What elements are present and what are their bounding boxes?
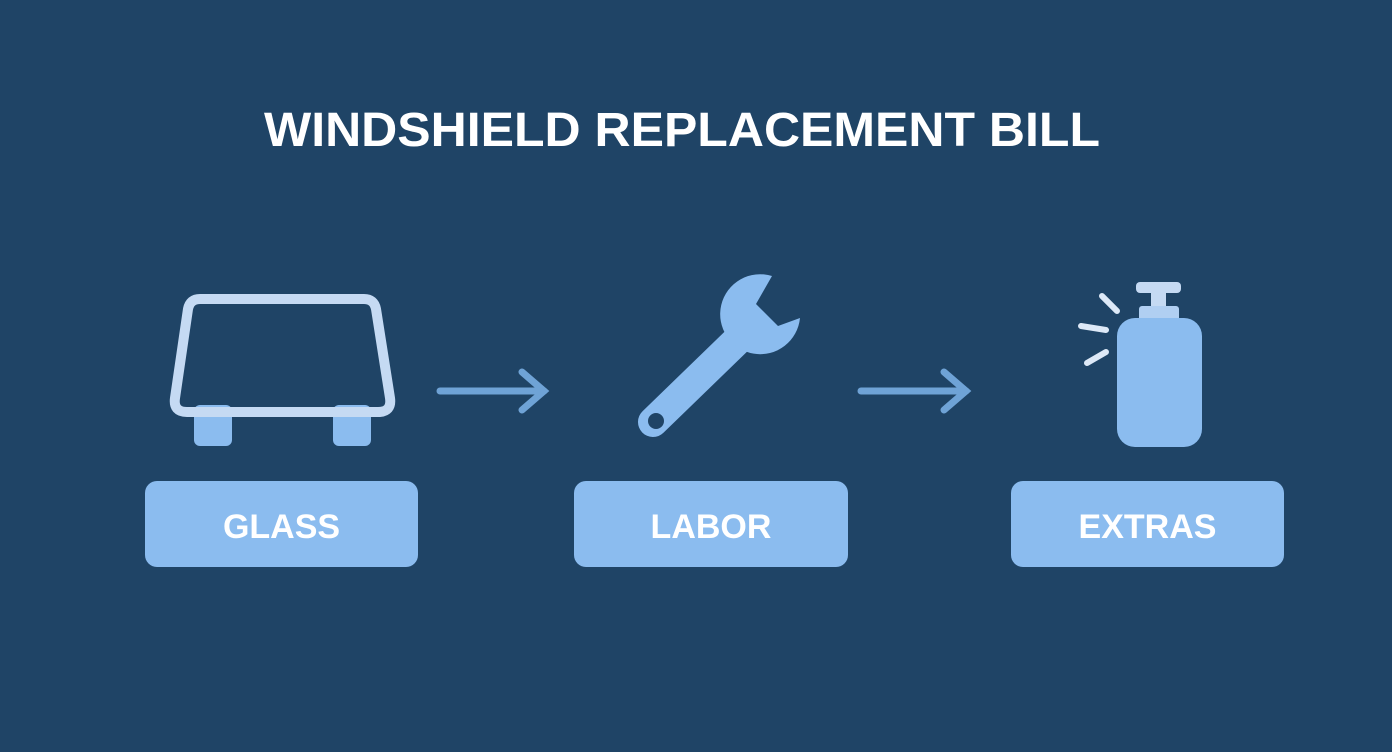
button: labor (574, 481, 848, 567)
icon: windshield (175, 299, 390, 446)
button: extras (1011, 481, 1284, 567)
button: extras: EXTRAS (1079, 508, 1216, 546)
button: glass (145, 481, 418, 567)
button: glass: GLASS (223, 508, 340, 546)
icon: spray bottle (1081, 282, 1202, 447)
button: labor: LABOR (651, 508, 771, 546)
arrow: labor to extras (861, 372, 966, 410)
icon: wrench (648, 274, 800, 429)
title: WINDSHIELD REPLACEMENT BILL (264, 104, 1100, 157)
arrow: glass to labor (440, 372, 544, 410)
